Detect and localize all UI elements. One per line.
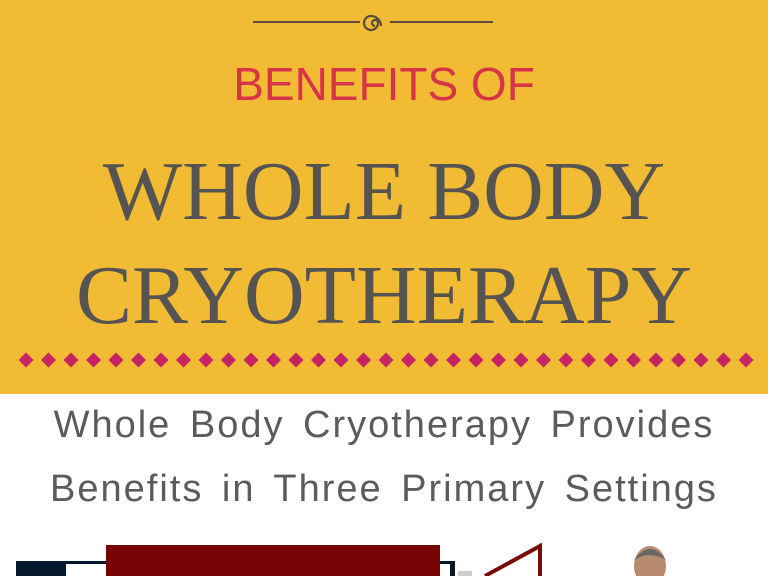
subtitle: Benefits in Three Primary Settings [50,468,718,510]
subtitle [50,404,718,510]
subtitle: Whole Body Cryotherapy Provides [54,404,714,446]
bottom image strip (cropped) [16,542,666,576]
panel: yellow header [0,0,768,394]
photo: person head [634,546,666,576]
decorative diamond row [18,352,754,368]
title: WHOLE BODY CRYOTHERAPY [76,145,692,342]
heading: BENEFITS OF: BENEFITS OF [233,58,535,110]
image: dark red block [106,545,440,576]
icon: red triangle outline [458,542,542,576]
title: WHOLE BODY CRYOTHERAPY: WHOLE BODY [103,145,665,238]
ornament: line with swirl [253,14,493,32]
title: WHOLE BODY CRYOTHERAPY: CRYOTHERAPY [76,249,692,342]
image: navy frame [16,561,455,576]
